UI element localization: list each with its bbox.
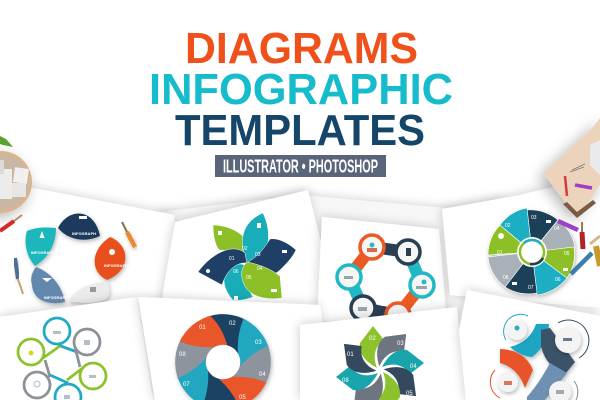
star numbers: 06 <box>233 269 239 275</box>
leaf labels <box>31 231 128 300</box>
star numbers <box>229 246 263 281</box>
star numbers: 05 <box>246 275 252 281</box>
star icons <box>206 223 287 300</box>
pie numbers: 08 <box>503 275 509 281</box>
panel: sheet with looped rings <box>0 297 153 400</box>
leaf labels: INFOGRAPH <box>104 263 128 268</box>
pie numbers: 02 <box>505 223 511 229</box>
icon: blue pencil <box>15 258 23 294</box>
icons in leaves <box>40 216 115 292</box>
star numbers: 04 <box>257 266 263 272</box>
pie numbers: 03 <box>531 215 537 221</box>
chart: spiral blades <box>335 325 425 400</box>
swirl numbers: 03 <box>255 340 262 346</box>
subtitle badge <box>215 155 386 177</box>
arc rings <box>490 314 589 400</box>
swirl numbers: 04 <box>259 372 266 378</box>
subtitle badge: ILLUSTRATOR • PHOTOSHOP <box>223 156 378 176</box>
blade numbers: 05 <box>406 391 413 397</box>
chart: chain of rings <box>337 235 434 327</box>
panel: sheet with leaf ring <box>0 188 175 322</box>
chart: segmented pie <box>488 208 575 295</box>
panel: sheet with spiral blades <box>300 307 466 400</box>
star numbers: 02 <box>242 246 248 252</box>
blade numbers: 08 <box>342 378 349 384</box>
pie numbers: 07 <box>528 285 534 291</box>
icon: wooden tray <box>543 118 600 218</box>
panel: sheet with swirl ring <box>138 297 335 400</box>
chain icons <box>344 242 427 311</box>
panel: sheet with arc diagram <box>459 290 600 400</box>
pie numbers: 06 <box>555 277 561 283</box>
icon: desk pens <box>558 221 600 274</box>
star numbers: 03 <box>255 252 261 258</box>
swirl numbers: 01 <box>199 325 206 331</box>
chart: swirl ring <box>173 312 273 400</box>
chart: four arcs <box>500 324 575 400</box>
blade numbers <box>342 336 417 397</box>
leaf labels: INFOGRAPH <box>31 250 55 255</box>
swirl numbers: 02 <box>229 321 236 327</box>
ring icons <box>28 331 96 399</box>
icon: green pencil <box>0 136 13 147</box>
blade numbers: 04 <box>410 364 417 370</box>
panel: sheet with star diagram <box>160 190 340 315</box>
pie numbers: 04 <box>554 226 560 232</box>
swirl numbers <box>179 321 266 400</box>
icon: bowl of cubes <box>0 151 32 213</box>
title <box>149 24 453 155</box>
swirl numbers: 08 <box>179 352 186 358</box>
blade numbers: 01 <box>347 352 354 358</box>
background sheets <box>0 195 520 400</box>
blade numbers: 03 <box>397 341 404 347</box>
pie numbers: 01 <box>497 250 503 256</box>
swirl numbers: 07 <box>183 382 190 388</box>
chart: leaf ring <box>26 214 125 303</box>
arc discs <box>498 320 581 400</box>
icon: red pencil <box>0 215 22 231</box>
pie numbers <box>497 215 570 291</box>
panel: sheet with pie diagram <box>442 175 600 308</box>
pie numbers: 05 <box>564 251 570 257</box>
pie hub <box>517 237 547 267</box>
swirl hub <box>206 345 240 379</box>
leaf labels: INFOGRAPH <box>72 231 96 236</box>
title line: infographic: INFOGRAPHIC <box>149 65 453 114</box>
pie icons <box>498 220 568 285</box>
blade numbers: 02 <box>369 336 376 342</box>
disc icons <box>504 326 572 394</box>
chart: looped rings <box>18 318 106 400</box>
leaf labels: INFOGRAPH <box>44 295 68 300</box>
icon: orange pencil <box>122 222 135 247</box>
star numbers: 01 <box>229 256 235 262</box>
title line: diagrams: DIAGRAMS <box>185 24 418 73</box>
title line: templates: TEMPLATES <box>175 106 425 155</box>
panel: sheet with chain hexagon <box>317 217 446 327</box>
chart: six-petal star <box>198 213 296 300</box>
